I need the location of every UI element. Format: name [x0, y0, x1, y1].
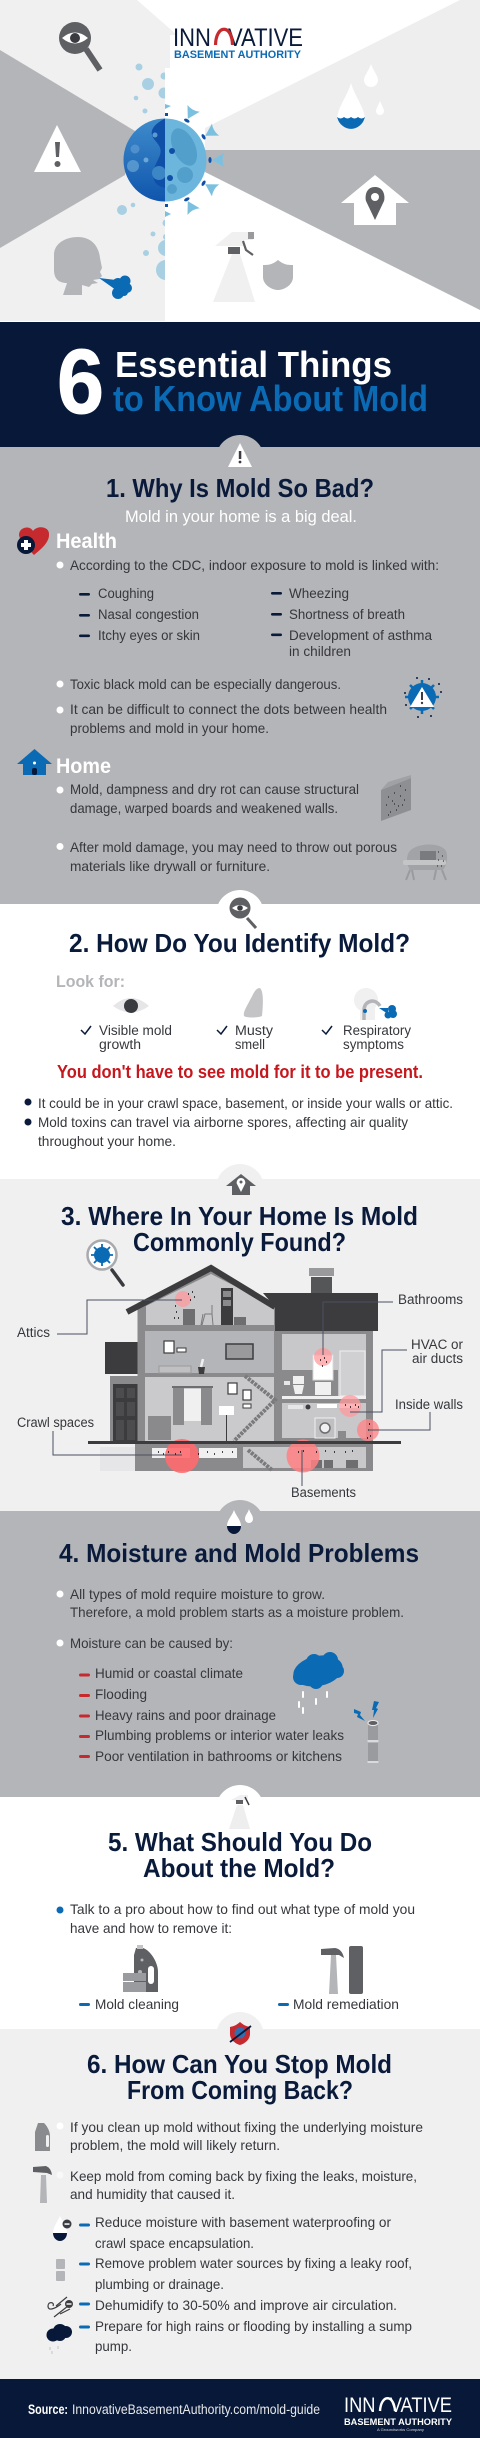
heading 6: From Coming Back? [127, 2075, 353, 2105]
label: crawl spaces: Crawl spaces [17, 1415, 94, 1430]
icon: rain cloud [290, 1651, 346, 1713]
heading 5 [108, 1827, 372, 1883]
health text block: According to the CDC, indoor exposure to mold is linked with: [70, 557, 439, 573]
check item: respiratory symptoms [322, 1023, 411, 1052]
check item: visible mold growth [81, 1023, 172, 1052]
bullet: moisture requirement: All types of mold require moisture to grow. [70, 1586, 325, 1602]
attic room [146, 1274, 274, 1325]
bullet: fix the leaks [56, 2168, 417, 2202]
ground line [88, 1441, 401, 1444]
icon: moldy chair [403, 845, 447, 880]
symptoms list left: Coughing [98, 586, 154, 601]
check item: visible mold growth: Visible mold [99, 1023, 172, 1038]
item: remove water sources: Remove problem water sources by fixing a leaky roof, [95, 2255, 412, 2271]
symptoms list right: Wheezing [289, 586, 349, 601]
mold specks [158, 1292, 371, 1454]
laundry fixtures [288, 1404, 360, 1438]
check item: respiratory symptoms: Respiratory [343, 1023, 411, 1038]
bullet: talk to a pro: have and how to remove it: [70, 1920, 232, 1936]
logo: Innovative Basement Authority: INNOVATIVE [173, 24, 303, 52]
icon: moldy wall [381, 775, 411, 821]
icon: mold spore bubbles [117, 64, 165, 280]
panel: section 6 prevention [0, 2012, 480, 2379]
icon: hammer [33, 2166, 52, 2203]
bullet: toxic black mold: Toxic black mold can be especially dangerous. [70, 676, 341, 692]
living room contents [148, 1383, 251, 1441]
bullet: moisture causes: Moisture can be caused by: [70, 1635, 233, 1651]
panel: section 3 where mold is found [0, 1164, 480, 1511]
icon: house pin tab [226, 1174, 256, 1195]
icon: blue house [17, 749, 52, 775]
icon: heart with plus [17, 527, 49, 555]
check item: musty smell [217, 1023, 273, 1052]
icon: bottle [35, 2123, 50, 2151]
icon: drop with minus [53, 2216, 72, 2241]
logo: footer: BASEMENT AUTHORITY [344, 2417, 453, 2428]
bullet: airborne spores [24, 1114, 408, 1149]
bullet: connecting the dots: problems and mold in your home. [70, 720, 269, 736]
icon: respiratory head [354, 988, 397, 1020]
living room [145, 1377, 274, 1441]
label: inside walls: Inside walls [395, 1397, 463, 1412]
causes list: Poor ventilation in bathrooms or kitchens [95, 1748, 342, 1764]
heading 6: 6. How Can You Stop Mold [87, 2049, 392, 2079]
title numeral: 6 [57, 331, 104, 433]
symptoms list left: Itchy eyes or skin [98, 628, 200, 643]
home heading: Home [56, 755, 111, 778]
bullet: fix the leaks: and humidity that caused it. [70, 2186, 235, 2202]
roof left [127, 1268, 275, 1312]
icon: cleaning bottle and sponge [123, 1945, 158, 1992]
item: remove water sources [79, 2255, 412, 2292]
item: dehumidify: Dehumidify to 30-50% and improve air circulation. [95, 2297, 397, 2313]
laundry room [282, 1403, 366, 1438]
icon: nose [244, 988, 263, 1018]
item: sump pump: pump. [95, 2338, 132, 2354]
icon: shield [263, 260, 293, 290]
check item: visible mold growth: growth [99, 1037, 141, 1052]
bullet: clean up mold: If you clean up mold without fixing the underlying moisture [70, 2119, 423, 2135]
bullet: fix the leaks: Keep mold from coming back by fixing the leaks, moisture, [70, 2168, 417, 2184]
symptoms list left [79, 586, 200, 643]
look for label: Look for: [56, 972, 125, 991]
panel: footer [0, 2379, 480, 2438]
bullet: moisture requirement [56, 1586, 404, 1620]
label: hvac or air ducts [411, 1337, 463, 1366]
bullet: structural damage [56, 781, 359, 816]
bullet: clean up mold: problem, the mold will likely return. [70, 2137, 280, 2153]
health heading: Health [56, 530, 117, 553]
check item: respiratory symptoms: symptoms [343, 1037, 404, 1052]
icon: warning triangle [34, 125, 81, 172]
item: reduce moisture [79, 2214, 391, 2251]
mold hotspots [165, 1291, 379, 1473]
icon: water drops [337, 64, 384, 129]
item: mold cleaning: Mold cleaning [95, 1996, 179, 2012]
item: sump pump: Prepare for high rains or flooding by installing a sump [95, 2318, 412, 2334]
icon: magnifier with spore [88, 1240, 123, 1285]
label: bathrooms: Bathrooms [398, 1292, 463, 1307]
bullet: throw out porous materials: After mold damage, you may need to throw out porous [70, 839, 397, 855]
bullet: airborne spores: throughout your home. [38, 1133, 176, 1149]
symptoms list right: Development of asthma [289, 628, 432, 643]
check item: musty smell: Musty [235, 1023, 273, 1038]
leader lines [53, 1300, 430, 1486]
main house shell [138, 1268, 275, 1443]
bedroom [145, 1331, 274, 1373]
label: hvac or air ducts: HVAC or [411, 1337, 463, 1352]
panel: hero illustration [0, 0, 480, 322]
right wing shell [275, 1330, 373, 1443]
symptoms list right: Shortness of breath [289, 607, 405, 622]
steps at crawl space [100, 1447, 135, 1471]
panel: section 2 identify mold [0, 890, 480, 1179]
icon: leaking pipe [354, 1701, 379, 1762]
heading 3: Commonly Found? [133, 1227, 346, 1257]
symptoms list right: in children [289, 644, 351, 659]
icon: magnifier with eye [59, 22, 100, 70]
bullet: talk to a pro: Talk to a pro about how to find out what type of mold you [70, 1901, 415, 1917]
icon: coughing head [54, 237, 132, 299]
heading 3: 3. Where In Your Home Is Mold [61, 1201, 418, 1231]
icon: wind with minus [48, 2297, 73, 2317]
item: reduce moisture: Reduce moisture with basement waterproofing or [95, 2214, 391, 2230]
logo: footer: INNOVATIVE [344, 2394, 452, 2417]
icon: spray bottle tab [229, 1795, 250, 1829]
basement [135, 1444, 373, 1471]
icon: mold spore virus [123, 104, 224, 217]
icon: pipe [56, 2259, 65, 2281]
source label: Source: [28, 2402, 68, 2417]
label: basements: Basements [291, 1485, 356, 1500]
red callout: You don't have to see mold for it to be present. [57, 1062, 423, 1082]
panel: section 1 why mold is bad [0, 435, 480, 904]
icon: red shield no mold [230, 2022, 251, 2045]
panel: title banner [0, 322, 480, 447]
item: mold remediation: Mold remediation [293, 1996, 399, 2012]
heading 6 [87, 2049, 392, 2105]
basement boxes [311, 1460, 358, 1468]
icon: mold warning [404, 678, 442, 717]
bullet: throw out porous materials: materials like drywall or furniture. [70, 858, 270, 874]
icon: dark rain cloud [46, 2324, 72, 2354]
causes list: Plumbing problems or interior water leaks [95, 1727, 344, 1743]
label: attics: Attics [17, 1325, 50, 1340]
bullet: structural damage: Mold, dampness and dry rot can cause structural [70, 781, 359, 797]
icon: house with location pin [341, 175, 409, 225]
roof right [263, 1293, 378, 1331]
symptoms list right [271, 586, 432, 659]
bullet: connecting the dots [56, 701, 387, 736]
source url: InnovativeBasementAuthority.com/mold-guide [72, 2402, 320, 2417]
bathroom [282, 1334, 366, 1396]
icon: drops tab [227, 1509, 253, 1534]
bullet: where it could be: It could be in your crawl space, basement, or inside your walls or attic. [38, 1095, 453, 1111]
logo: footer: A Groundworks Company [377, 2427, 424, 2432]
causes list: Humid or coastal climate [95, 1665, 243, 1681]
item: remove water sources: plumbing or drainage. [95, 2276, 224, 2292]
logo: footer [344, 2394, 453, 2432]
heading 5: 5. What Should You Do [108, 1827, 372, 1857]
icon: spray bottle [213, 232, 255, 302]
bathroom fixtures [284, 1351, 365, 1396]
bullet: throw out porous materials [56, 839, 397, 874]
title line 1: Essential Things [115, 344, 392, 385]
icon: warning tab [228, 443, 252, 467]
panel: section 4 moisture [0, 1500, 480, 1797]
stairs [234, 1376, 275, 1470]
chart: house cutaway [53, 1268, 430, 1486]
heading 3 [61, 1201, 418, 1257]
causes list [79, 1665, 344, 1764]
bullet: moisture requirement: Therefore, a mold problem starts as a moisture problem. [70, 1604, 404, 1620]
chimney [309, 1268, 334, 1293]
bullet: clean up mold [56, 2119, 423, 2153]
garage [105, 1342, 138, 1443]
subheading: Mold in your home is a big deal. [125, 507, 357, 526]
title line 2: to Know About Mold [113, 378, 428, 419]
bullet: talk to a pro [56, 1901, 415, 1936]
logo: Innovative Basement Authority: BASEMENT AUTHORITY [174, 49, 302, 61]
icon: hammer and brush [321, 1946, 363, 1994]
symptoms list left: Nasal congestion [98, 607, 199, 622]
heading 5: About the Mold? [143, 1853, 335, 1883]
item: reduce moisture: crawl space encapsulation. [95, 2235, 254, 2251]
item: sump pump [79, 2318, 412, 2354]
bullet: airborne spores: Mold toxins can travel via airborne spores, affecting air quality [38, 1114, 408, 1130]
icon: eye [113, 998, 149, 1013]
panel: section 5 what to do [0, 1785, 480, 2029]
attic contents [183, 1288, 246, 1325]
check item: musty smell: smell [235, 1037, 265, 1052]
bedroom contents [159, 1341, 253, 1374]
icon: magnifier tab [230, 898, 256, 928]
causes list: Flooding [95, 1686, 147, 1702]
heading 4: 4. Moisture and Mold Problems [59, 1538, 419, 1568]
causes list: Heavy rains and poor drainage [95, 1707, 276, 1723]
bullet: structural damage: damage, warped boards and weakened walls. [70, 800, 338, 816]
bullet: connecting the dots: It can be difficult to connect the dots between health [70, 701, 387, 717]
label: hvac or air ducts: air ducts [412, 1351, 463, 1366]
heading 2: 2. How Do You Identify Mold? [69, 928, 410, 958]
heading 1: 1. Why Is Mold So Bad? [106, 473, 374, 503]
